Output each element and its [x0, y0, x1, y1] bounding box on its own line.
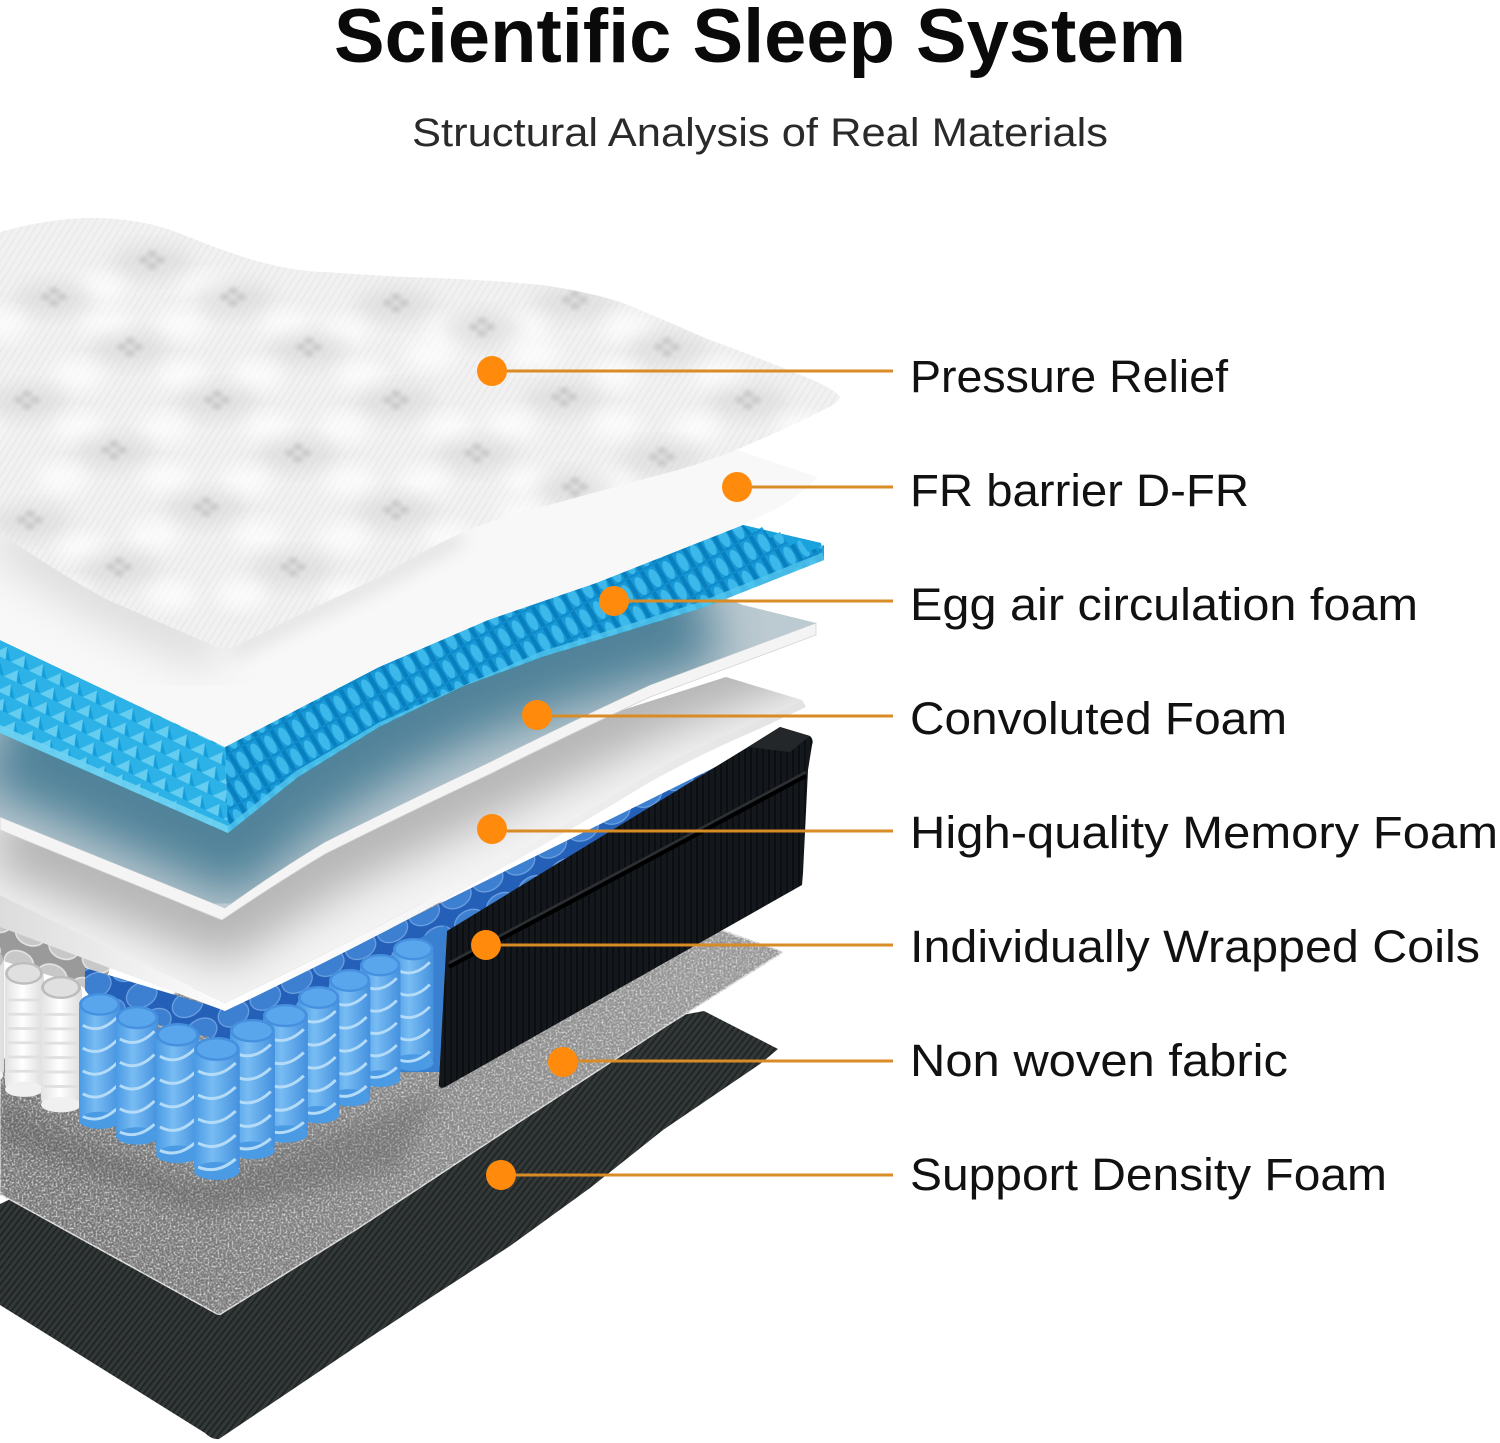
- callout: FR barrier D-FR: FR barrier D-FR: [910, 465, 1249, 516]
- callout: Convoluted Foam: [522, 693, 1287, 744]
- layer: egg air circulation foam: [0, 525, 824, 833]
- layer: pressure relief quilted top: [0, 210, 850, 660]
- black side panel: [439, 727, 813, 1088]
- subtitle: Structural Analysis of Real Materials: [412, 111, 1108, 155]
- blue coils: [79, 938, 433, 1180]
- callout: Support Density Foam: [486, 1149, 1387, 1200]
- callout: Convoluted Foam: Convoluted Foam: [910, 693, 1287, 744]
- layer: convoluted foam: [0, 590, 816, 920]
- callout: Pressure Relief: Pressure Relief: [910, 351, 1229, 402]
- callout: High-quality Memory Foam: High-quality Memory Foam: [910, 807, 1498, 858]
- layer: high-quality memory foam: [0, 677, 806, 1011]
- layer: FR barrier: [0, 529, 689, 747]
- callout: Individually Wrapped Coils: Individually Wrapped Coils: [910, 921, 1480, 972]
- callout: FR barrier D-FR: [722, 465, 1249, 516]
- coil tops behind the memory foam: [0, 735, 790, 1072]
- layer: non woven fabric: [0, 900, 783, 1315]
- layer: support density foam: [0, 1011, 778, 1439]
- callout: Non woven fabric: [548, 1035, 1288, 1086]
- coils: individually wrapped: [0, 938, 433, 1180]
- callout: Individually Wrapped Coils: [471, 921, 1480, 972]
- callout: Pressure Relief: [477, 351, 1229, 402]
- callout: Support Density Foam: Support Density Foam: [910, 1149, 1387, 1200]
- callout: High-quality Memory Foam: [477, 807, 1498, 858]
- white coils: [0, 948, 82, 1112]
- callout: Non woven fabric: Non woven fabric: [910, 1035, 1288, 1086]
- callout: Egg air circulation foam: Egg air circulation foam: [910, 579, 1418, 630]
- callout: Egg air circulation foam: [599, 579, 1418, 630]
